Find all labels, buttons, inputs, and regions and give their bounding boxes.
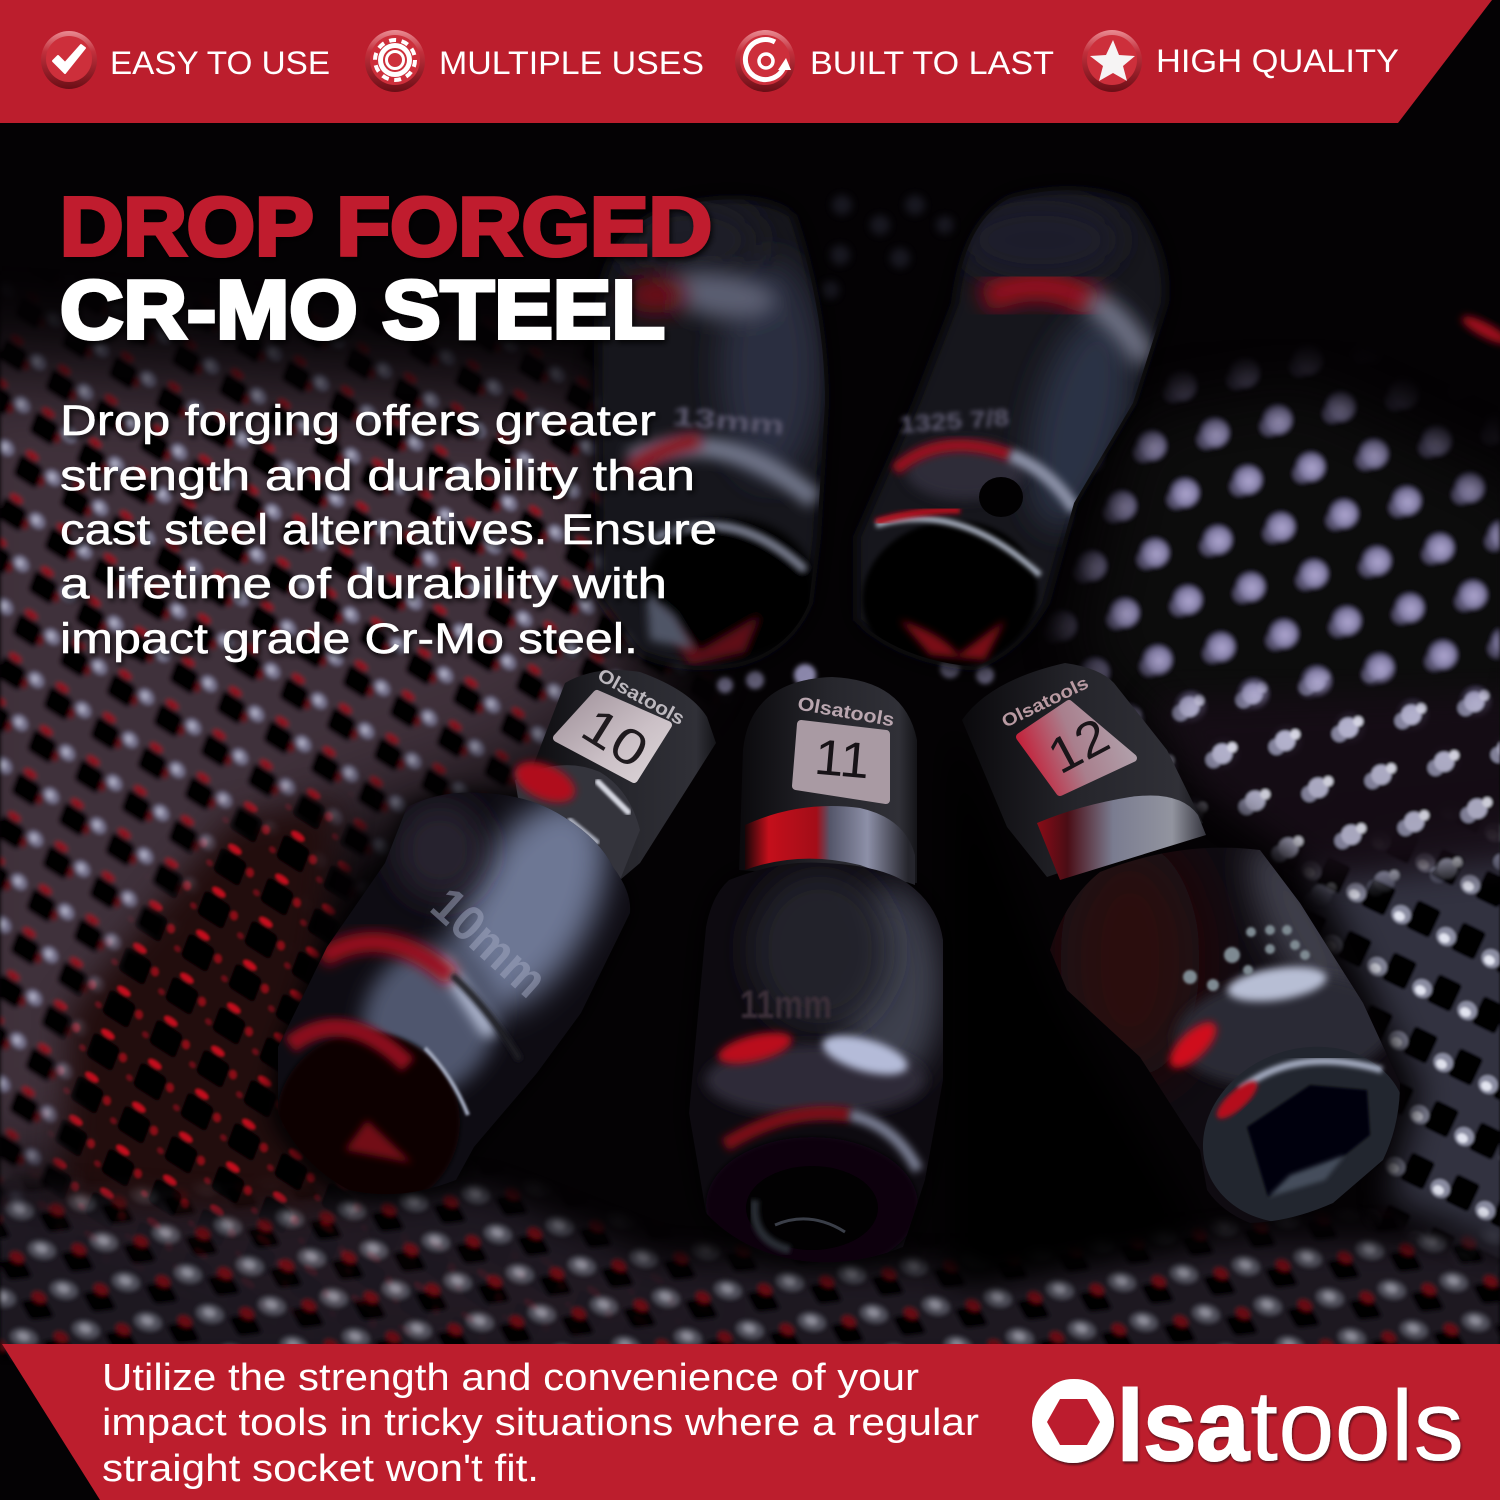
neck 12 (962, 663, 1203, 877)
feature: multiple uses: MULTIPLE USES (439, 45, 704, 81)
socket: blurred back left (598, 199, 825, 666)
icon: gear (365, 30, 425, 92)
logo: Olsatools: lsa (1117, 1370, 1250, 1482)
feature: high quality (1082, 30, 1399, 92)
body text: Drop forging offers greater (60, 397, 656, 445)
embossed size mark: 10mm (420, 876, 558, 1008)
bottom tagline: impact tools in tricky situations where a regular (102, 1402, 979, 1444)
bottom banner (2, 1344, 1500, 1500)
embossed bumps (1183, 925, 1310, 991)
socket 12: Olsatools (998, 672, 1092, 732)
body text: strength and durability than (60, 452, 695, 500)
body text: cast steel alternatives. Ensure (60, 506, 717, 554)
body text: impact grade Cr-Mo steel. (60, 615, 638, 663)
plate 11 (796, 724, 886, 800)
logo: Olsatools: O (1036, 1358, 1112, 1483)
plate 12 (1020, 704, 1133, 792)
body text: a lifetime of durability with (60, 560, 667, 608)
neck 11 (739, 677, 917, 883)
heading (60, 180, 712, 356)
distant out-of-focus dots (821, 195, 954, 299)
socket 11 (689, 677, 943, 1273)
heading: DROP FORGED (60, 180, 712, 273)
ring 10 (509, 753, 640, 880)
logo: Olsatools: tools (1250, 1370, 1464, 1482)
plate 12: 12 (1039, 707, 1118, 785)
socket 10: Olsatools (594, 665, 688, 730)
feature: built to last: BUILT TO LAST (810, 45, 1054, 81)
heading: CR-MO STEEL (60, 263, 665, 356)
icon: star (1082, 30, 1142, 92)
feature: multiple uses (365, 30, 704, 92)
bottom tagline (102, 1357, 979, 1490)
socket 10 (276, 665, 716, 1212)
socket 11: Olsatools (796, 694, 896, 731)
feature: built to last (735, 30, 1054, 92)
feature: high quality: HIGH QUALITY (1156, 43, 1399, 79)
feature: easy to use: EASY TO USE (110, 45, 330, 81)
neck 10 (520, 670, 716, 880)
icon: check mark (41, 31, 97, 89)
socket 12 (950, 663, 1432, 1290)
body text (60, 397, 717, 663)
bottom tagline: straight socket won't fit. (102, 1448, 539, 1490)
bottom tagline: Utilize the strength and convenience of your (102, 1357, 919, 1399)
feature: easy to use (41, 31, 330, 89)
icon: circular arrow with gear (735, 30, 795, 92)
plate 11: 11 (812, 729, 872, 789)
embossed size mark: 11mm (740, 983, 832, 1027)
logo: Olsatools (1032, 1358, 1464, 1483)
top banner (0, 0, 1492, 123)
plate 10 (557, 694, 668, 779)
embossed size mark: 13mm (671, 401, 786, 441)
socket: blurred back right (850, 190, 1166, 683)
photo background: textured mat (0, 192, 1500, 1361)
plate 10: 10 (572, 697, 658, 779)
embossed size mark: 1325 7/8 (899, 404, 1010, 439)
